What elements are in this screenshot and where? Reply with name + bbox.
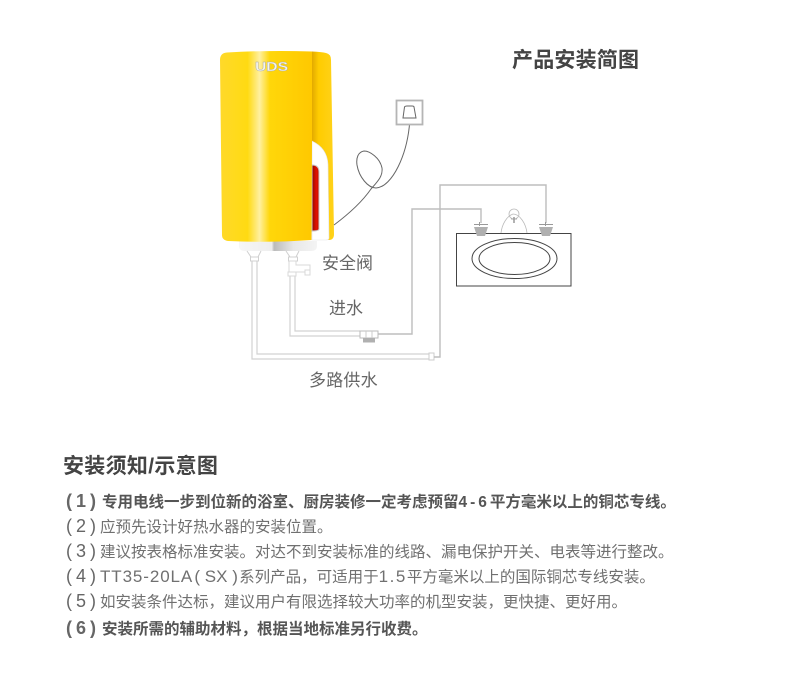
note 2: ( 2 ) <box>66 516 96 536</box>
title: 产品安装简图 <box>512 49 639 72</box>
wall socket <box>396 100 422 124</box>
note 5: ( 5 ) <box>66 591 96 611</box>
note 3: 建议按表格标准安装。对达不到安装标准的线路、漏电保护开关、电表等进行整改。 <box>100 544 674 561</box>
notes list <box>66 491 676 638</box>
note 6: ( 6 ) <box>66 618 96 638</box>
installation diagram <box>220 51 572 360</box>
heater body <box>220 51 312 242</box>
pipe: multi-way supply <box>252 256 430 359</box>
label: safety valve: 安全阀 <box>322 254 373 273</box>
heater couplings <box>247 251 299 261</box>
safety valve <box>288 261 310 276</box>
section heading: 安装须知/示意图 <box>63 455 218 478</box>
note 4: ( 4 ) <box>66 566 96 586</box>
note 5: 如安装条件达标，建议用户有限选择较大功率的机型安装，更快捷、更好用。 <box>100 594 627 611</box>
power cable <box>334 118 410 225</box>
note 4: ( SX ) <box>194 567 238 586</box>
note 1: ( 1 ) <box>66 491 96 511</box>
pipe: water inlet <box>290 272 360 336</box>
wash basin <box>456 234 571 286</box>
note 4: TT35-20LA 系列产品，可适用于1.5平方毫米以上的国际铜芯专线安装。 <box>100 567 655 586</box>
basin faucet <box>501 209 527 233</box>
heater red indicator <box>312 165 319 231</box>
label: water inlet: 进水 <box>329 299 363 318</box>
inlet valve <box>360 331 378 342</box>
heater side panel <box>312 52 334 240</box>
note 6: 安装所需的辅助材料，根据当地标准另行收费。 <box>102 621 428 638</box>
note 3: ( 3 ) <box>66 541 96 561</box>
note 2: 应预先设计好热水器的安装位置。 <box>100 519 333 536</box>
heater base <box>239 241 317 251</box>
brand logo: UDS <box>255 59 288 74</box>
right tap <box>539 222 553 236</box>
note 1: 专用电线一步到位新的浴室、厨房装修一定考虑预留4-6平方毫米以上的铜芯专线。 <box>102 494 676 511</box>
left tap <box>474 222 488 236</box>
pipes <box>252 185 546 360</box>
heater white window <box>312 141 329 240</box>
label: multi-way supply: 多路供水 <box>309 371 378 390</box>
